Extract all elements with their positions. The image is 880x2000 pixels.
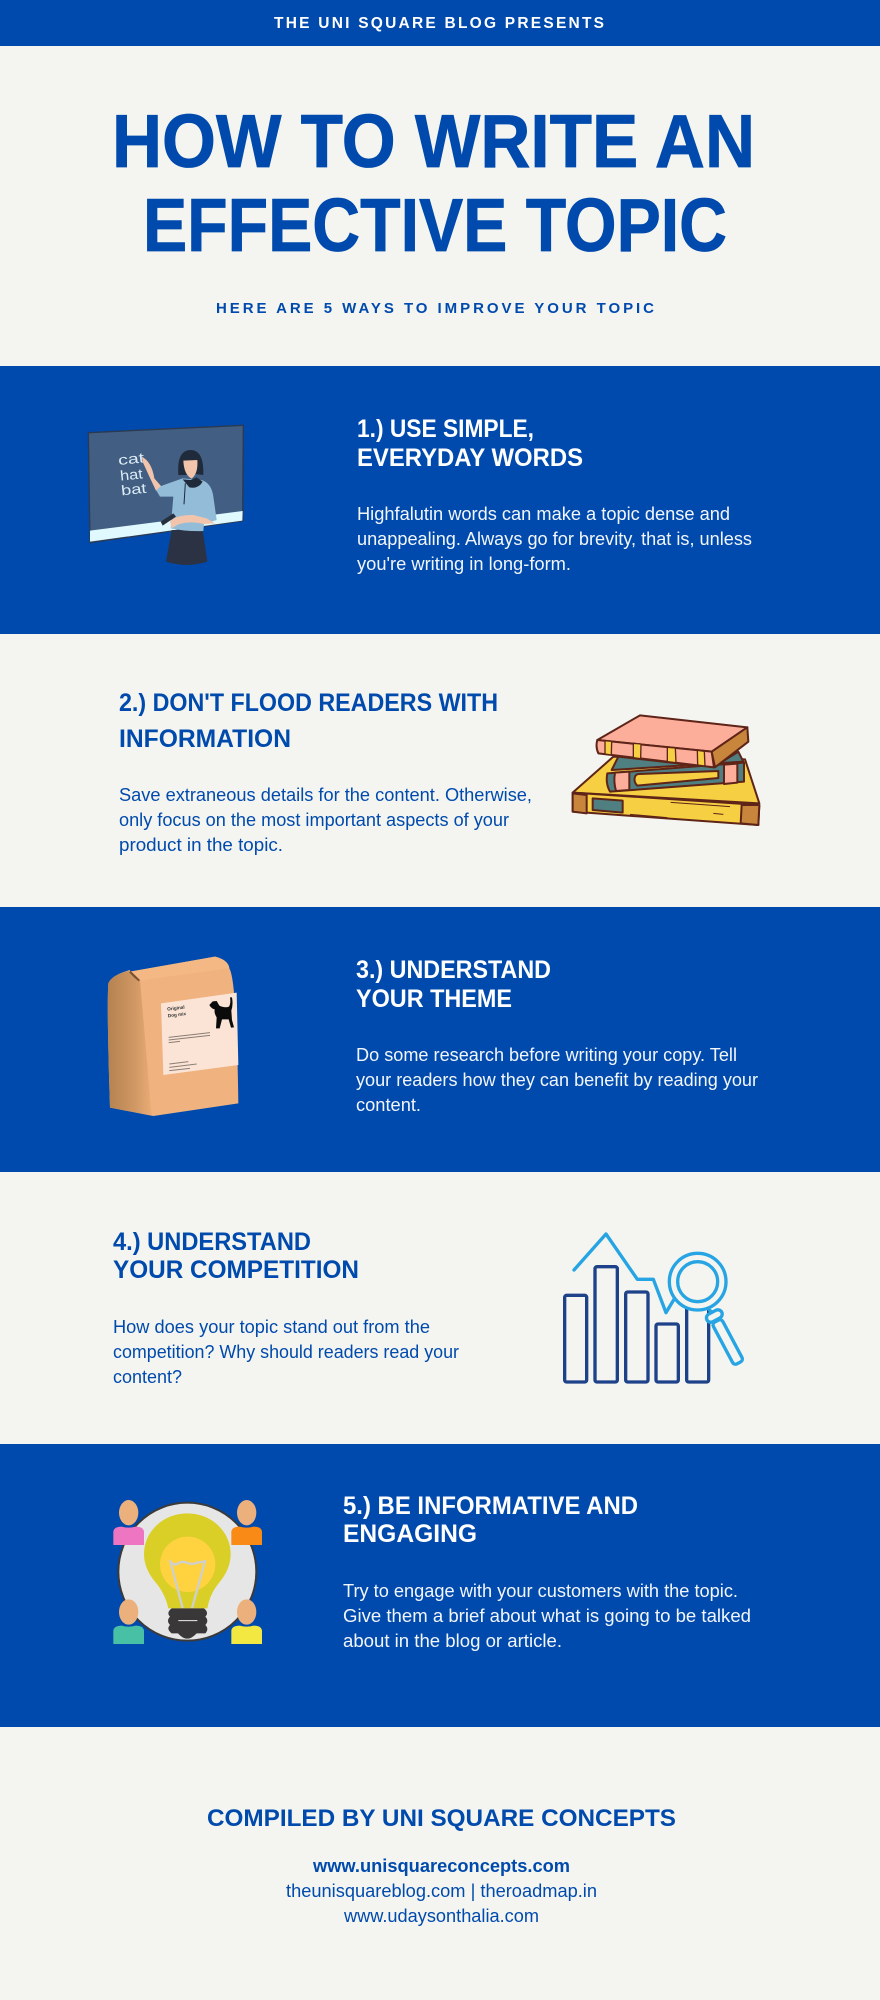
heading: tip 1: 1.) USE SIMPLE, (357, 415, 534, 443)
icon: teacher at chalkboard: hat (119, 465, 144, 484)
person: top right (231, 1500, 262, 1545)
heading: tip 1 (357, 415, 583, 472)
footer credits (207, 1805, 676, 1926)
body text: tip 2: product in the topic. (119, 835, 283, 855)
icon: paper bag of dog mix: Original (167, 1005, 185, 1012)
footer links: theunisquareblog.com | theroadmap.in (286, 1881, 597, 1901)
footer heading: COMPILED BY UNI SQUARE CONCEPTS (207, 1805, 676, 1832)
icon: light bulb with four people (113, 1500, 262, 1644)
icon: teacher at chalkboard: cat (117, 449, 145, 468)
header bar (0, 0, 880, 46)
icon: paper bag of dog mix: Dog mix (168, 1011, 187, 1018)
body text: tip 3: content. (356, 1095, 421, 1115)
heading: tip 4 (113, 1228, 359, 1284)
icon: teacher at chalkboard: bat (120, 480, 147, 498)
subtitle: HERE ARE 5 WAYS TO IMPROVE YOUR TOPIC (216, 300, 654, 317)
body text: tip 1: unappealing. Always go for brevity, that is, unless (357, 529, 752, 549)
body text: tip 1: Highfalutin words can make a topic dense and (357, 504, 730, 524)
title: EFFECTIVE TOPIC (143, 183, 727, 267)
body text: tip 3: your readers how they can benefit by reading your (356, 1070, 758, 1090)
body text: tip 4: How does your topic stand out from the (113, 1317, 430, 1337)
body text: tip 4: content? (113, 1367, 182, 1387)
body text: tip 5: about in the blog or article. (343, 1631, 562, 1651)
body text: tip 2 (119, 785, 532, 855)
heading: tip 5 (343, 1492, 638, 1548)
heading: tip 5: ENGAGING (343, 1520, 477, 1548)
title (112, 99, 755, 267)
body text: tip 3 (356, 1045, 758, 1115)
heading: tip 4: YOUR COMPETITION (113, 1256, 359, 1284)
heading: tip 3: 3.) UNDERSTAND (356, 956, 551, 984)
heading: tip 2: INFORMATION (119, 725, 291, 753)
footer links: www.unisquareconcepts.com (312, 1856, 570, 1876)
body text: tip 4: competition? Why should readers read your (113, 1342, 459, 1362)
heading: tip 1: EVERYDAY WORDS (357, 444, 583, 472)
title: HOW TO WRITE AN (112, 99, 755, 183)
body text: tip 5: Give them a brief about what is going to be talked (343, 1606, 751, 1626)
person: bottom right (231, 1599, 262, 1644)
panel: tip 3 (0, 907, 880, 1172)
body text: tip 1 (357, 504, 752, 574)
heading: tip 3 (356, 956, 551, 1013)
person: top left (113, 1500, 144, 1545)
body text: tip 2: only focus on the most important aspects of your (119, 810, 509, 830)
icon: bar chart with magnifying glass (565, 1234, 744, 1382)
header bar: THE UNI SQUARE BLOG PRESENTS (274, 15, 604, 32)
panel: tip 1 (0, 366, 880, 634)
panel: tip 2 (119, 689, 759, 855)
footer links: www.udaysonthalia.com (343, 1906, 539, 1926)
footer links (286, 1856, 597, 1926)
body text: tip 5 (343, 1581, 751, 1651)
body text: tip 2: Save extraneous details for the content. Otherwise, (119, 785, 532, 805)
heading: tip 5: 5.) BE INFORMATIVE AND (343, 1492, 638, 1520)
panel: tip 5 (0, 1444, 880, 1727)
icon: teacher at chalkboard (88, 425, 243, 565)
heading: tip 4: 4.) UNDERSTAND (113, 1228, 311, 1256)
body text: tip 4 (113, 1317, 459, 1387)
panel: tip 4 (113, 1228, 744, 1387)
body text: tip 5: Try to engage with your customers with the topic. (343, 1581, 738, 1601)
heading: tip 2: 2.) DON'T FLOOD READERS WITH (119, 689, 498, 717)
heading: tip 2 (119, 689, 498, 753)
person: bottom left (113, 1599, 144, 1644)
icon: paper bag of dog mix (108, 957, 238, 1116)
icon: stack of books (573, 715, 759, 825)
heading: tip 3: YOUR THEME (356, 985, 512, 1013)
body text: tip 1: you're writing in long-form. (357, 554, 571, 574)
body text: tip 3: Do some research before writing your copy. Tell (356, 1045, 737, 1065)
